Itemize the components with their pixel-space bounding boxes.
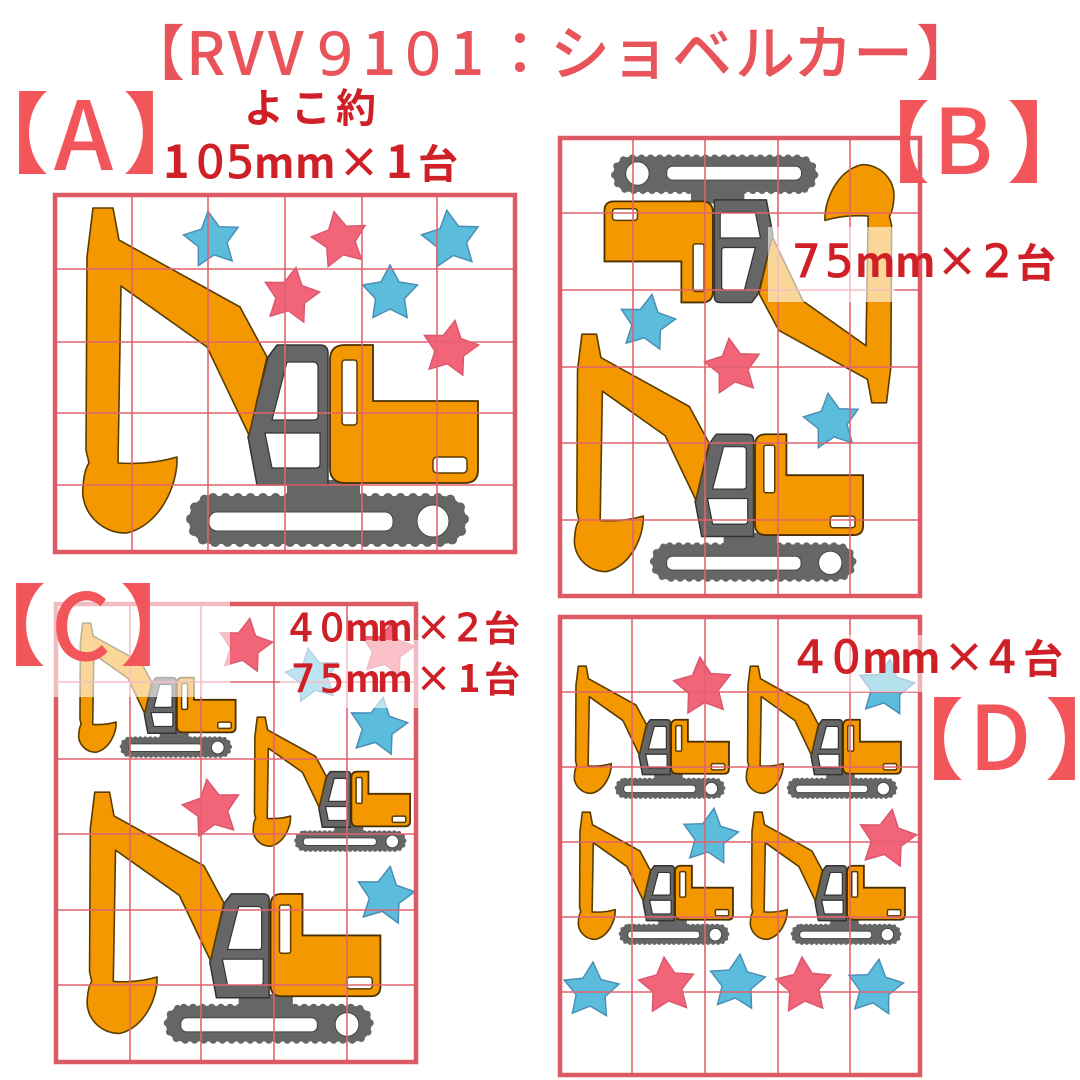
size text: A: 1 [163, 126, 190, 191]
title: 1 [362, 6, 396, 93]
title: 【RVV [125, 6, 304, 93]
label: B [842, 70, 1080, 201]
size text: A [163, 76, 458, 191]
label: C: C [51, 554, 110, 687]
size text: D: mm× [862, 625, 985, 686]
label: B: 【 [842, 74, 930, 201]
excavator: sheet C small top [79, 623, 236, 756]
size text: B: 2 [983, 235, 1012, 288]
size text: C: 台 [484, 600, 520, 652]
size text: C: 1 [458, 648, 480, 703]
size text: C [289, 598, 520, 703]
size text: C: mm× [345, 649, 452, 703]
label: B: B [933, 70, 993, 200]
stars: sheet C [179, 614, 418, 925]
excavator: sheet D bottom right [750, 812, 905, 943]
size text: C: 2 [456, 606, 480, 650]
excavator: sheet D top right [746, 666, 901, 797]
stars: sheet B [616, 290, 863, 449]
stars: sheet D [562, 654, 920, 1016]
excavator: sheet B upper, rotated [604, 158, 894, 403]
label: C [0, 554, 208, 687]
size text: C: 75 [291, 657, 344, 701]
panel: sheet D [560, 617, 925, 1075]
size text: A: 1 [386, 126, 413, 191]
title: 1：ショベルカー】 [450, 6, 976, 93]
size text: A: 05 [196, 136, 255, 189]
size text: C: 台 [484, 651, 520, 703]
panel: sheet B [560, 138, 920, 596]
label: A: 】 [123, 65, 211, 192]
excavator: sheet A 105mm [83, 208, 478, 542]
excavator: sheet D bottom left [578, 812, 733, 943]
size text: D: 台 [1023, 627, 1063, 685]
size text: C: 40 [289, 606, 344, 650]
size text: A: 台 [418, 132, 458, 190]
size text: A: mm× [254, 130, 380, 191]
size text: D: 4 [988, 631, 1017, 684]
panel: sheet A [55, 195, 515, 552]
label: A: A [54, 61, 114, 198]
excavator: sheet C large [87, 792, 380, 1040]
title: 0 [404, 20, 442, 90]
size text: D: 40 [796, 631, 861, 684]
label: D: 【 [876, 671, 964, 798]
label: C: 】 [120, 557, 208, 684]
stars: sheet A [181, 206, 483, 377]
size text: B: mm× [855, 229, 978, 290]
label: D [876, 667, 1080, 798]
label: D: D [969, 667, 1031, 796]
excavator: sheet B lower [574, 334, 863, 578]
title: 9 [316, 20, 354, 90]
label: A [0, 61, 211, 198]
excavator: sheet C small middle [253, 717, 410, 850]
size text: A: よこ約 [244, 76, 376, 134]
size text: C: mm× [345, 598, 452, 652]
size text: B: 75 [792, 235, 854, 288]
panel: sheet C [50, 598, 420, 1062]
size text: B: 台 [1016, 231, 1056, 289]
excavator: sheet D top left [574, 666, 729, 797]
